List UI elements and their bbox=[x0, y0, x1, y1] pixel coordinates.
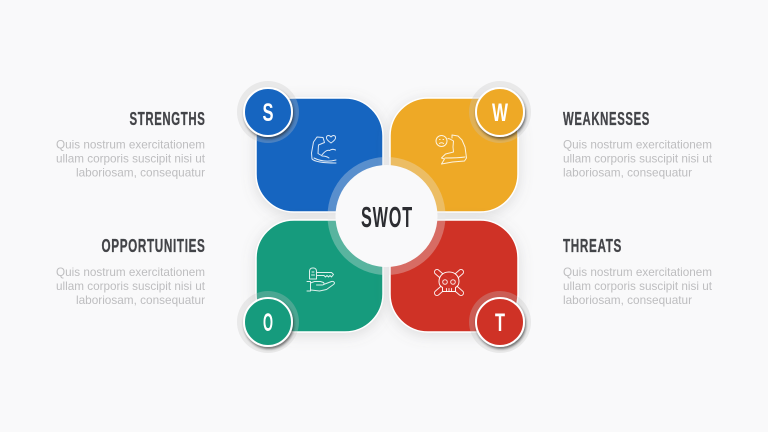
center SWOT circle: SWOT bbox=[361, 202, 413, 234]
icon: weak arm with sad face bbox=[436, 135, 466, 164]
text block: opportunities: ullam corporis suscipit nisi ut bbox=[56, 279, 206, 293]
text block: threats: Quis nostrum exercitationem bbox=[563, 265, 712, 279]
badge: O: O bbox=[263, 309, 273, 337]
text block: threats bbox=[563, 236, 713, 307]
text block: opportunities bbox=[56, 236, 206, 307]
icon: flexed arm with heart bbox=[312, 136, 336, 163]
badge: W: W bbox=[492, 99, 508, 127]
text block: strengths: laboriosam, consequatur bbox=[76, 166, 205, 180]
badge: T bbox=[469, 291, 531, 353]
panel: opportunities card bbox=[256, 220, 383, 332]
text block: weaknesses: ullam corporis suscipit nisi ut bbox=[563, 152, 713, 166]
text block: opportunities: OPPORTUNITIES bbox=[102, 236, 206, 256]
icon: skull and crossbones bbox=[437, 272, 461, 293]
text block: weaknesses: Quis nostrum exercitationem bbox=[563, 138, 712, 152]
badge: T: T bbox=[495, 309, 505, 337]
text block: threats: ullam corporis suscipit nisi ut bbox=[563, 279, 713, 293]
badge: W bbox=[469, 81, 531, 143]
text block: threats: laboriosam, consequatur bbox=[563, 293, 692, 307]
text block: opportunities: Quis nostrum exercitationem bbox=[56, 265, 205, 279]
text block: opportunities: laboriosam, consequatur bbox=[76, 293, 205, 307]
text block: weaknesses: WEAKNESSES bbox=[563, 109, 650, 129]
badge: O bbox=[237, 291, 299, 353]
text block: strengths: Quis nostrum exercitationem bbox=[56, 138, 205, 152]
panel: weaknesses card bbox=[390, 98, 518, 212]
icon: hand holding key bbox=[307, 268, 334, 291]
badge: S: S bbox=[262, 99, 274, 127]
text block: weaknesses: laboriosam, consequatur bbox=[563, 166, 692, 180]
text block: strengths bbox=[56, 109, 206, 180]
text block: threats: THREATS bbox=[563, 236, 622, 256]
center SWOT circle bbox=[328, 157, 446, 275]
panel: threats card bbox=[390, 220, 518, 332]
text block: strengths: STRENGTHS bbox=[130, 109, 206, 129]
text block: weaknesses bbox=[563, 109, 713, 180]
badge: S bbox=[237, 81, 299, 143]
panel: strengths card bbox=[256, 98, 383, 212]
text block: strengths: ullam corporis suscipit nisi ut bbox=[56, 152, 206, 166]
